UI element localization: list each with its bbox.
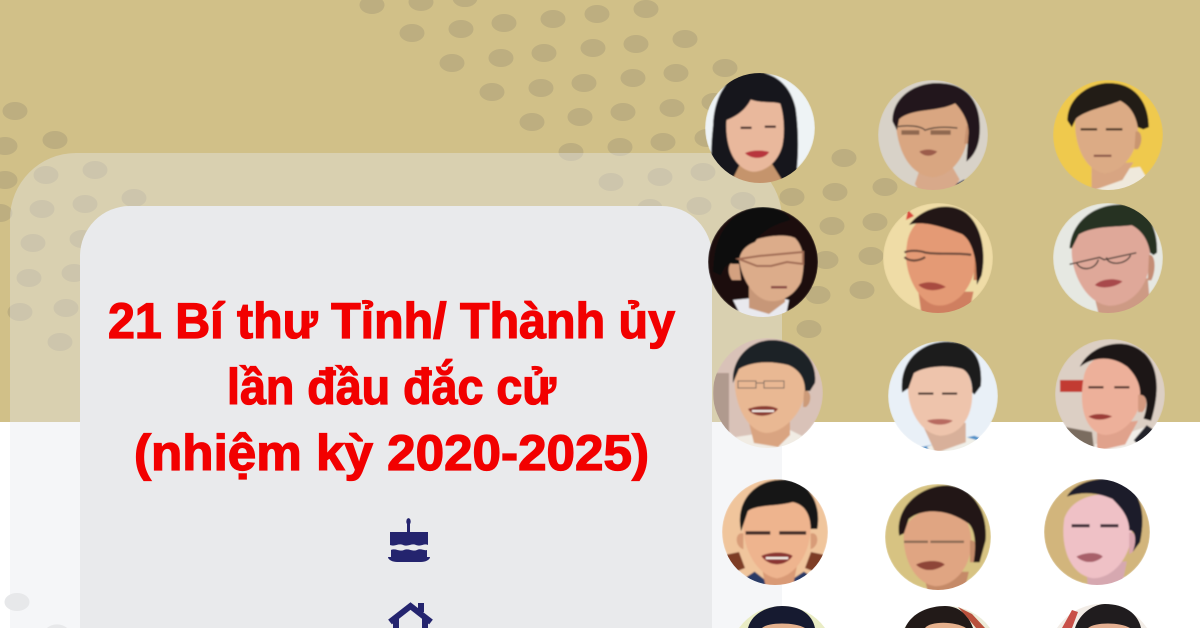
portrait 8 xyxy=(888,341,998,462)
portrait 2 xyxy=(878,80,988,200)
portrait 5 xyxy=(883,203,993,313)
portrait 14 xyxy=(904,606,990,628)
panel: translucent backing card xyxy=(10,153,782,628)
portrait 11 xyxy=(885,484,991,590)
title: (nhiệm kỳ 2020-2025) xyxy=(134,425,649,481)
icon: house xyxy=(390,603,431,628)
portrait 10 xyxy=(722,479,828,585)
portrait 7 xyxy=(713,338,823,451)
background: pale dots on white xyxy=(4,593,67,628)
title xyxy=(108,293,675,481)
portrait 12 xyxy=(1044,479,1150,585)
title: lần đầu đắc cử xyxy=(227,359,557,415)
portrait 13 xyxy=(739,606,825,628)
portrait 6 xyxy=(1053,203,1163,313)
portrait 15 xyxy=(1057,604,1147,628)
portrait 3 xyxy=(1053,80,1163,200)
panel: main grey card xyxy=(80,206,712,628)
icon: birthday cake xyxy=(388,518,430,562)
background: tan band xyxy=(0,0,1200,422)
portrait 1 xyxy=(705,72,815,192)
title: 21 Bí thư Tỉnh/ Thành ủy xyxy=(108,293,675,349)
portrait 4 xyxy=(708,207,818,320)
portrait 9 xyxy=(1055,339,1165,460)
background: dot pattern xyxy=(0,0,898,351)
